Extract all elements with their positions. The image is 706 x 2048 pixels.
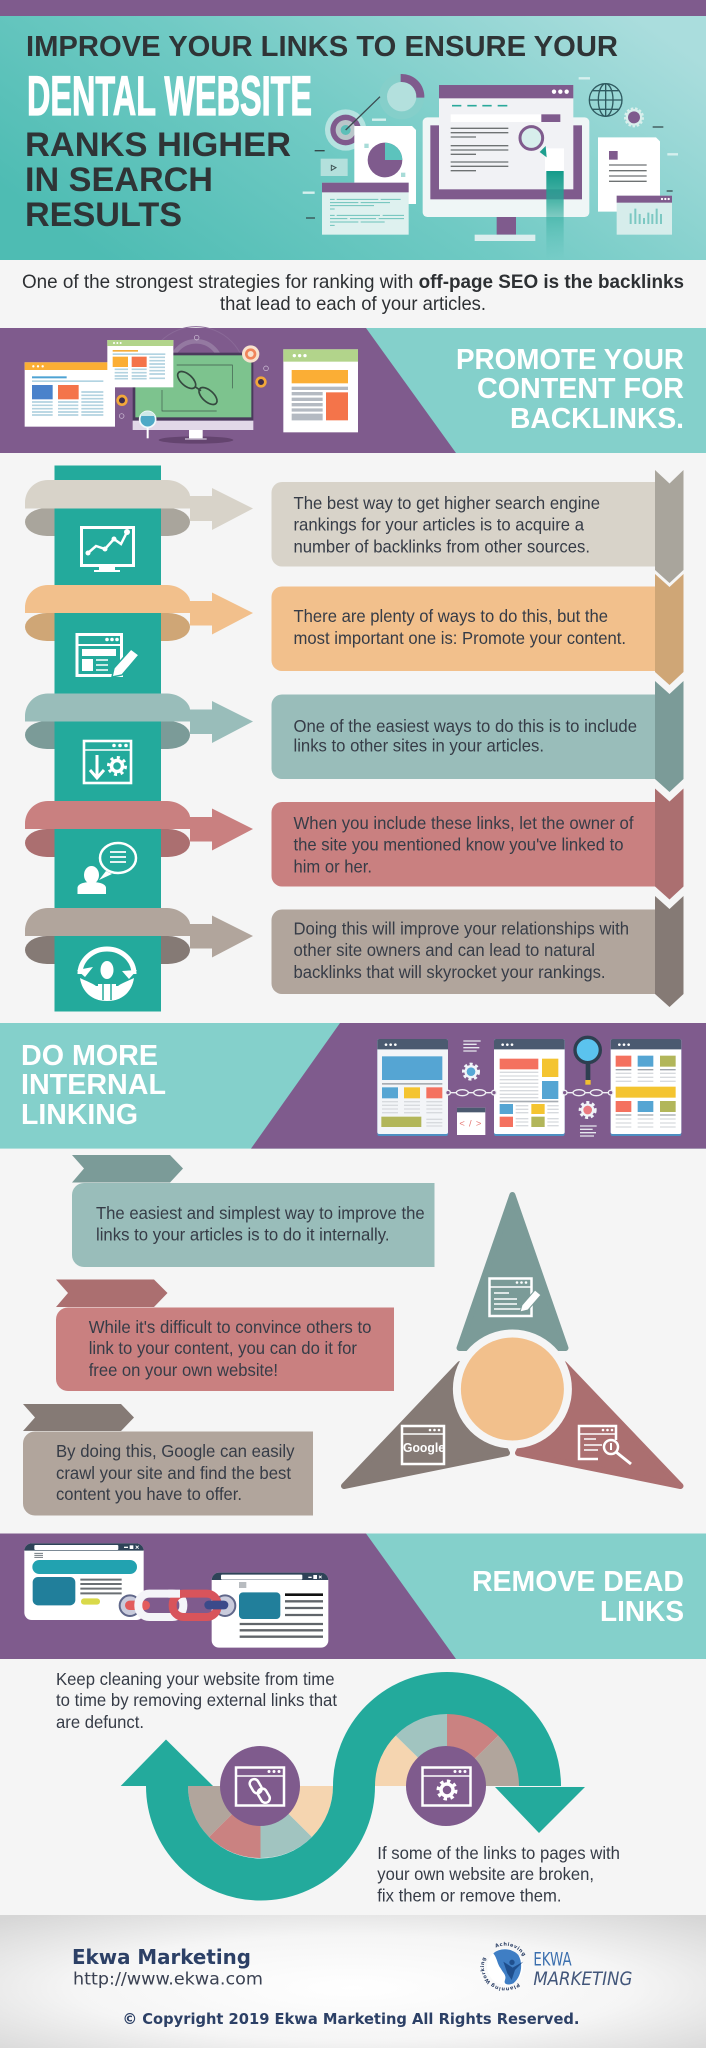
callout 2 text: free on your own website! [89, 1360, 278, 1380]
ribbon shadows [25, 508, 190, 964]
callout 3 text [56, 1441, 295, 1504]
chains [446, 1090, 613, 1096]
right badge [406, 1746, 486, 1826]
text card 2 [272, 574, 684, 685]
copyright: © Copyright 2019 Ekwa Marketing All Rights Reserved. [122, 2010, 580, 2028]
chevron 1 [655, 470, 684, 583]
centre circle [461, 1338, 564, 1440]
box 1 [72, 1183, 434, 1267]
heading: internal linking: LINKING [21, 1099, 138, 1131]
chevron 2 [655, 574, 684, 685]
logo [480, 1942, 632, 1991]
text: fix broken links: fix them or remove them. [377, 1886, 562, 1906]
left fan [188, 1786, 333, 1858]
company name: Ekwa Marketing [72, 1945, 251, 1969]
card 4 text: the site you mentioned know you've linked to [294, 835, 624, 855]
chain [120, 1594, 235, 1617]
heading: promote: BACKLINKS. [510, 403, 684, 435]
intro text [22, 271, 684, 315]
blade top [460, 1195, 566, 1348]
callout 2 text: While it's difficult to convince others to [89, 1317, 371, 1337]
title: RESULTS [25, 196, 182, 234]
donut chart [379, 74, 424, 119]
section band: internal linking [0, 1023, 706, 1149]
icon: chart monitor [82, 528, 134, 572]
title [25, 31, 618, 234]
heading: remove dead links [472, 1566, 684, 1628]
heading: remove dead links: LINKS [600, 1596, 684, 1628]
window left [24, 1543, 144, 1620]
callout 3 text: crawl your site and find the best [56, 1463, 291, 1483]
ribbon arrow 3 [25, 694, 253, 743]
icon: page with magnifier [579, 1426, 631, 1464]
left badge [220, 1746, 300, 1826]
section band: remove dead links [0, 1534, 706, 1659]
card 2 text: There are plenty of ways to do this, but the [294, 606, 608, 626]
chevron 4 [655, 788, 684, 900]
intro text: One of the strongest strategies for ranking with off-page SEO is the backlinks [22, 271, 684, 293]
illustration: linked pages: < / > [459, 1118, 481, 1128]
icon: download and gear [84, 741, 131, 783]
card 1 text: number of backlinks from other sources. [294, 536, 590, 556]
card 3 text: links to other sites in your articles. [294, 736, 544, 756]
card 2 text: most important one is: Promote your content. [294, 628, 626, 648]
callout 3 text: content you have to offer. [56, 1484, 242, 1504]
illustration: two linked browser windows [24, 1543, 328, 1648]
ribbon arrow 2 [25, 585, 253, 634]
text: keep cleaning: Keep cleaning your website from time [56, 1669, 334, 1689]
title: IN SEARCH [25, 161, 213, 199]
heading: remove dead links: REMOVE DEAD [472, 1566, 684, 1598]
callout 3 [23, 1404, 313, 1516]
chevron 3 [655, 681, 684, 792]
text card 1 [272, 470, 684, 583]
blade right [518, 1364, 680, 1486]
callout 2 [56, 1280, 394, 1391]
text card 5 [272, 896, 684, 1007]
callout 2 text: link to your content, you can do it for [89, 1338, 357, 1358]
heading: internal linking: DO MORE [21, 1040, 158, 1072]
card 5 text: backlinks that will skyrocket your rankings. [294, 962, 606, 982]
right fan [374, 1713, 520, 1786]
teal column [54, 466, 161, 1012]
tag 3 [23, 1404, 134, 1431]
card 3 text [294, 716, 637, 756]
card 3 text: One of the easiest ways to do this is to include [294, 716, 637, 736]
S-curve diagram [121, 1693, 585, 1880]
card 5 text [294, 919, 629, 982]
box 3 [23, 1432, 313, 1516]
page 3 [611, 1039, 681, 1136]
heading: internal linking [21, 1040, 166, 1131]
three-blade diagram [344, 1195, 680, 1486]
card 1 text: The best way to get higher search engine [294, 493, 600, 513]
icon: google page [402, 1426, 445, 1464]
callout 1 text [96, 1203, 425, 1245]
card 4 text: him or her. [294, 856, 372, 876]
website url: http://www.ekwa.com [73, 1970, 263, 1990]
illustration: backlink monitor and pages [25, 327, 358, 444]
title: DENTAL WEBSITE [27, 64, 312, 127]
section band: promote your content [0, 327, 706, 453]
callout 3 text: By doing this, Google can easily [56, 1441, 295, 1461]
page 2 [494, 1039, 565, 1136]
text card 4 [272, 788, 684, 900]
card 1 text: rankings for your articles is to acquire a [294, 515, 584, 535]
teal S arrow [121, 1693, 585, 1880]
text: fix broken links [377, 1843, 620, 1906]
callout 1 text: links to your articles is to do it internally. [96, 1225, 390, 1245]
logo: Planning [490, 1983, 520, 1991]
text: fix broken links: If some of the links to pages with [377, 1843, 620, 1863]
text card 3 [272, 681, 684, 792]
text: keep cleaning [56, 1669, 337, 1732]
window right [212, 1573, 328, 1648]
ribbon arrow 1 [25, 480, 253, 530]
title: RANKS HIGHER [25, 126, 291, 164]
tag 2 [56, 1280, 168, 1307]
card 5 text: other site owners and can lead to natural [294, 940, 595, 960]
text: keep cleaning: to time by removing external links that [56, 1690, 337, 1710]
logo: MARKETING [533, 1969, 632, 1990]
text: keep cleaning: are defunct. [56, 1712, 144, 1732]
icon: page and pencil [77, 634, 139, 677]
icon: person with speech bubble [78, 843, 136, 894]
page 1 [377, 1039, 448, 1136]
header illustration [303, 74, 678, 260]
callout 1 text: The easiest and simplest way to improve the [96, 1203, 425, 1223]
header panel [0, 16, 706, 260]
logo: Working [480, 1957, 490, 1984]
logo: Achieving [496, 1942, 526, 1956]
chevron 5 [655, 896, 684, 1007]
blade left [344, 1364, 507, 1486]
title: IMPROVE YOUR LINKS TO ENSURE YOUR [26, 31, 618, 63]
logo: EKWA [533, 1950, 572, 1971]
icon: page with pencil [490, 1278, 541, 1316]
text: fix broken links: your own website are broken, [377, 1864, 594, 1884]
heading: internal linking: INTERNAL [21, 1069, 166, 1101]
box 2 [56, 1308, 394, 1391]
tag 1 [72, 1155, 183, 1182]
card 4 text: When you include these links, let the owner of [294, 813, 634, 833]
card 2 text [294, 606, 626, 648]
card 4 text [294, 813, 634, 876]
callout 2 text [89, 1317, 371, 1380]
intro text: that lead to each of your articles. [220, 293, 486, 315]
ribbon column with five steps [25, 466, 253, 1012]
ribbon arrow 4 [25, 801, 253, 850]
icon: google page: Google [403, 1440, 445, 1455]
heading: promote [456, 344, 684, 435]
top bar [0, 0, 706, 16]
callout 1 [72, 1155, 434, 1267]
card 1 text [294, 493, 600, 556]
heading: promote: PROMOTE YOUR [456, 344, 684, 376]
card 5 text: Doing this will improve your relationships with [294, 919, 629, 939]
illustration: linked pages [377, 1037, 681, 1136]
ribbon arrow 5 [25, 908, 253, 958]
icon: person in circular arrows [77, 949, 137, 1001]
heading: promote: CONTENT FOR [477, 373, 684, 405]
footer [0, 1915, 706, 2048]
